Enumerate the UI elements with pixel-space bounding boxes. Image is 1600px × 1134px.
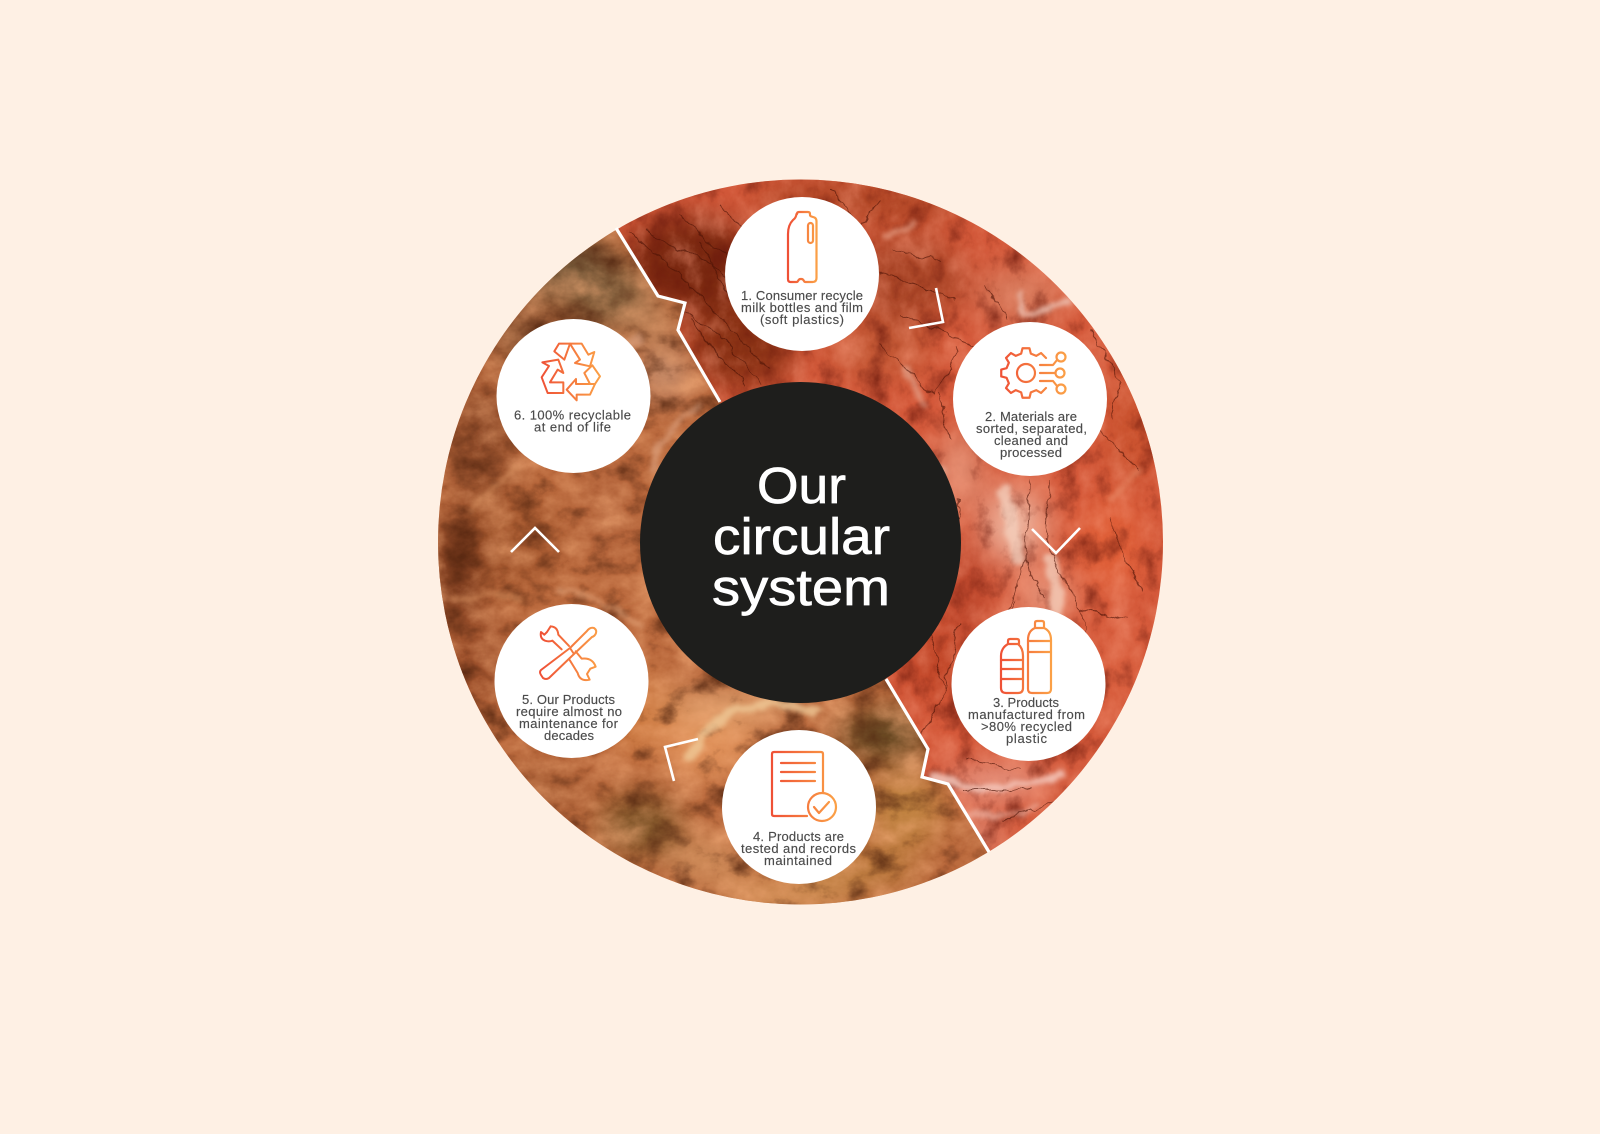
step 2 [953,322,1107,476]
step 1 [725,197,879,351]
text: step 5 [516,692,622,743]
icon: checked document [772,752,836,821]
text: step 4: tested and records [741,841,856,856]
text: step 4: 4. Products are [753,829,844,844]
icon: gear with circuit [1001,348,1066,398]
divider: upper left boundary [616,228,720,402]
title: Our [757,457,846,514]
title [712,457,890,616]
step 3 [952,607,1106,761]
icon: crossed wrench and screwdriver [540,626,596,680]
text: step 6: 6. 100% recyclable [514,408,631,422]
text: step 5: 5. Our Products [522,692,616,707]
step 5 [494,604,648,758]
photo disc [438,180,1163,904]
arrow: top right chevron [909,288,943,328]
pale ridges on right terrain [885,222,1140,816]
centre circle with title [640,382,961,703]
text: step 1: (soft plastics) [760,312,844,327]
text: step 2: 2. Materials are [985,409,1077,424]
text: step 2: cleaned and [994,433,1068,448]
photo panel: left rocky terrain [438,230,988,904]
text: step 2 [976,409,1087,460]
pale ridges on left terrain [455,340,815,760]
text: step 3: manufactured from [968,707,1085,722]
photo panel: right red terrain [618,180,1163,851]
text: step 3 [968,695,1085,746]
title: circular [713,508,890,565]
drainage veins [630,190,1140,820]
arrow: bottom left chevron [665,739,698,781]
text: step 6 [514,408,631,434]
text: step 5: decades [544,728,594,743]
text: step 5: require almost no [516,704,622,719]
text: step 2: processed [1000,445,1062,460]
text: step 2: sorted, separated, [976,421,1087,436]
text: step 5: maintenance for [519,716,619,731]
text: step 1: 1. Consumer recycle [741,288,863,303]
arrow: right chevron [1032,528,1080,553]
icon: two bottles [1001,621,1051,693]
infographic: circular system [438,180,1163,904]
text: step 3: plastic [1006,731,1048,746]
title: system [712,559,890,616]
icon: recycling arrows [542,344,600,400]
step 4 [722,730,876,884]
icon: milk bottle [788,212,816,282]
text: step 6: at end of life [534,420,611,434]
text: step 4 [741,829,856,868]
text: step 3: >80% recycled [981,719,1072,734]
text: step 4: maintained [764,853,832,868]
text: step 1 [741,288,863,327]
text: step 1: milk bottles and film [741,300,863,315]
step 6 [496,319,650,473]
text: step 3: 3. Products [993,695,1060,710]
arrow: left chevron [511,528,559,552]
divider: lower right boundary [886,679,989,852]
